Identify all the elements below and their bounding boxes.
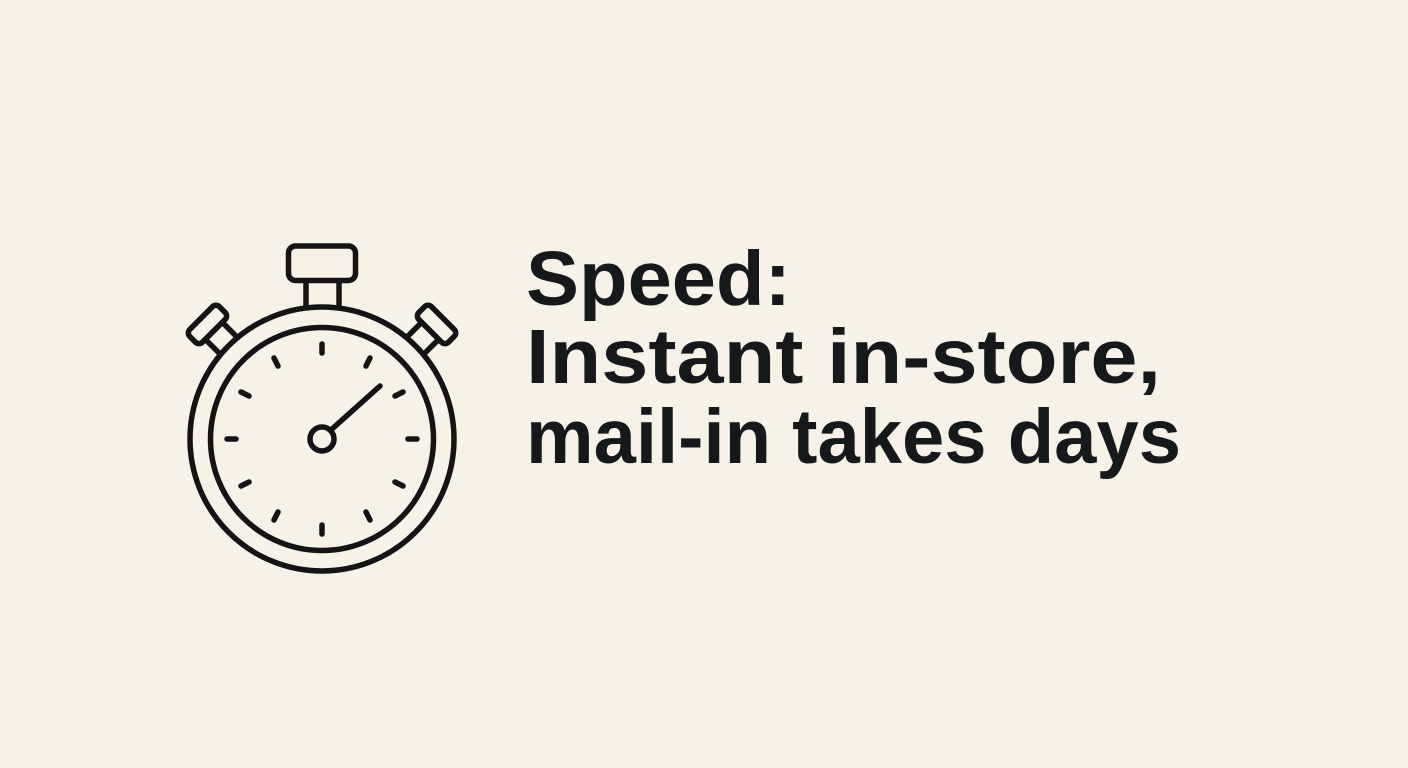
top crown button: [288, 246, 356, 307]
headline line 3: mail-in takes days: [526, 394, 1181, 480]
right side button: [401, 303, 458, 360]
icon: stopwatch: [186, 246, 458, 571]
hand pivot: [310, 427, 334, 451]
left side button: [186, 303, 243, 360]
inner dial ring: [210, 328, 434, 550]
outer case ring: [190, 307, 454, 571]
stopwatch hand: [332, 386, 380, 429]
headline line 1: Speed:: [526, 236, 791, 322]
headline text: [526, 236, 1181, 480]
dial tick marks: [227, 344, 417, 534]
headline line 2: Instant in-store,: [526, 314, 1161, 400]
